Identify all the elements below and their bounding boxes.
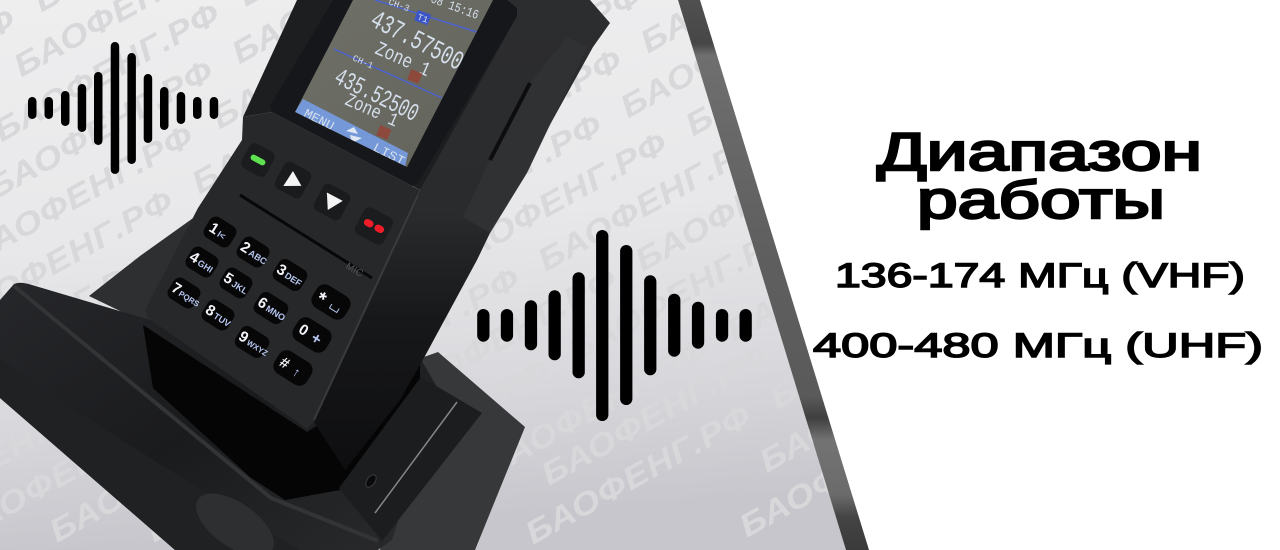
key 7: PQRS xyxy=(177,289,201,309)
title xyxy=(877,123,1202,230)
radio front lower plate xyxy=(145,112,420,429)
watermark pattern: БАОФЕНГ.РФ БАОФЕНГ.РФ xyxy=(536,204,1018,492)
display middle divider xyxy=(334,49,442,98)
radio side shell xyxy=(314,0,610,470)
key 7: 7 xyxy=(168,279,184,298)
key 8 xyxy=(199,297,237,333)
key 4: GHI xyxy=(196,258,215,275)
cradle right block xyxy=(380,352,525,550)
watermark pattern: БАОФЕНГ.РФ БАОФЕНГ.РФ БАОФЕНГ.РФ xyxy=(318,81,1045,505)
T1 badge: T1 xyxy=(416,13,429,26)
key 2 xyxy=(234,234,274,271)
key 3: 3 xyxy=(273,261,289,280)
key hash: # xyxy=(276,354,293,373)
key 8: TUV xyxy=(212,311,232,329)
cradle back wall xyxy=(89,216,240,340)
key 5 xyxy=(217,265,255,301)
key 2: 2 xyxy=(237,238,253,257)
T badge A xyxy=(407,69,422,84)
key 0: + xyxy=(308,330,324,349)
green call key xyxy=(239,141,277,179)
T badge B xyxy=(376,125,391,140)
key 6: 6 xyxy=(254,294,270,313)
key 5: JKL xyxy=(230,279,250,297)
key hash: ↑ xyxy=(290,364,303,380)
key 0 xyxy=(289,314,335,356)
zone B: Zone 1 xyxy=(342,89,402,132)
LIST label: LIST xyxy=(370,140,407,169)
watermark pattern: БАОФЕНГ.РФ xyxy=(754,326,992,479)
watermark pattern: БАОФЕНГ.РФ xyxy=(734,391,972,544)
cradle front body xyxy=(0,283,440,550)
MENU label: MENU xyxy=(301,106,337,134)
key 9: 9 xyxy=(235,328,251,347)
radio body xyxy=(145,0,610,470)
key 1 xyxy=(201,214,239,250)
display background xyxy=(295,0,493,167)
key 4: 4 xyxy=(186,248,203,268)
frequency B: 435.52500 xyxy=(329,63,423,129)
cradle contact highlight xyxy=(375,402,457,513)
key 3: DEF xyxy=(283,270,304,289)
channel 1 label: CH-1 xyxy=(351,54,375,72)
cradle latch hole xyxy=(364,473,378,489)
charging cradle xyxy=(0,216,525,550)
key 3 xyxy=(270,256,310,294)
background panel xyxy=(0,0,846,550)
key 4 xyxy=(183,244,221,280)
front edge highlight xyxy=(314,195,418,420)
key star xyxy=(307,281,354,324)
side port cover xyxy=(463,37,587,233)
sound wave: right xyxy=(477,230,752,421)
speaker slot xyxy=(240,195,372,278)
UHF range: 400-480 МГц (UHF) xyxy=(813,327,1263,365)
sound wave: left xyxy=(28,42,218,174)
T1 badge xyxy=(414,10,431,26)
down key xyxy=(312,182,352,222)
screen bezel xyxy=(270,0,517,186)
diagonal stripe xyxy=(678,0,869,550)
side cover slot xyxy=(490,83,530,160)
key 6 xyxy=(251,289,292,327)
red end key xyxy=(353,205,395,247)
cradle worn patch xyxy=(186,481,284,550)
key 2: ABC xyxy=(247,248,269,267)
key 8: 8 xyxy=(202,301,218,320)
key 1: I< xyxy=(215,229,227,242)
radio front top xyxy=(243,0,517,190)
cradle well shadow xyxy=(143,325,420,500)
cradle lip highlight xyxy=(14,286,378,541)
key hash xyxy=(270,347,316,389)
up down arrows xyxy=(346,127,362,143)
cradle lower face xyxy=(0,359,300,550)
up key xyxy=(273,160,313,200)
cradle contact block xyxy=(339,377,482,541)
key 9 xyxy=(232,323,275,362)
key 7 xyxy=(165,275,207,313)
key 6: MNO xyxy=(264,303,287,323)
key star: ⌴ xyxy=(327,297,344,316)
display bottom bar xyxy=(295,99,408,167)
key 9: WXYZ xyxy=(245,338,269,358)
display xyxy=(295,0,493,169)
watermark pattern: БАОФЕНГ.РФ БАОФЕНГ.РФ БАОФЕНГ.РФ БАОФЕНГ.РФ xyxy=(141,0,1112,549)
key 0: 0 xyxy=(295,321,311,340)
watermark pattern: БАОФЕНГ.РФ БАОФЕНГ.РФ БАОФЕНГ.РФ БАОФЕНГ.РФ xyxy=(44,0,1015,549)
watermark pattern: БАОФЕНГ.РФ БАОФЕНГ.РФ xyxy=(477,196,959,484)
title: Диапазон xyxy=(877,123,1202,182)
key 5: 5 xyxy=(220,269,236,288)
key star: * xyxy=(312,288,330,311)
watermark pattern: БАОФЕНГ.РФ БАОФЕНГ.РФ xyxy=(520,263,1002,550)
key 1: 1 xyxy=(206,219,222,238)
MIC label: MIC xyxy=(344,261,365,280)
keypad xyxy=(165,214,354,389)
display top divider xyxy=(375,0,480,33)
zone A: Zone 1 xyxy=(371,38,433,83)
frequency A: 437.57500 xyxy=(365,6,468,78)
title: работы xyxy=(917,171,1165,230)
VHF range: 136-174 МГц (VHF) xyxy=(835,257,1245,295)
